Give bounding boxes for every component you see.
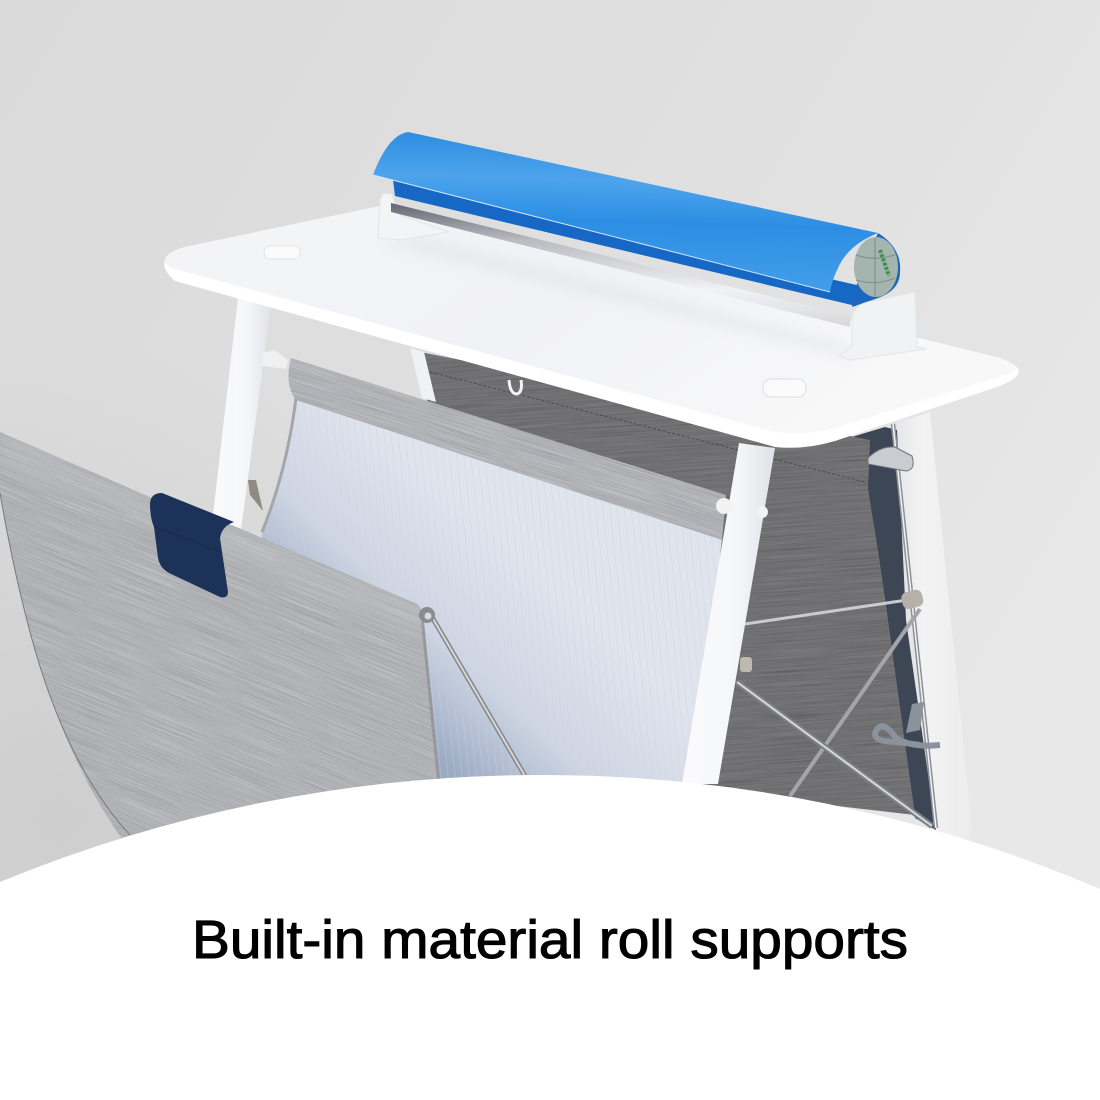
hook bbox=[509, 380, 522, 394]
blue material roll bbox=[373, 132, 900, 307]
title: built-in material roll supports: Built-in material roll supports bbox=[192, 910, 908, 970]
front gray fabric panel bbox=[0, 432, 440, 838]
chrome frame rods and clips bbox=[737, 424, 940, 828]
navy leather tab bbox=[150, 493, 234, 597]
gray top strip of paper panel bbox=[288, 358, 726, 540]
chrome roll bar bbox=[391, 203, 850, 327]
peg: right bbox=[763, 379, 806, 397]
back navy fabric edge bbox=[835, 427, 936, 830]
table top bbox=[164, 206, 1019, 448]
frame rod and grommet bbox=[419, 607, 525, 776]
back left table leg bbox=[410, 348, 436, 402]
right roll bracket bbox=[839, 292, 926, 360]
back fabric panel bbox=[424, 352, 914, 815]
front table leg bbox=[682, 443, 775, 784]
hanging paper panel bbox=[262, 398, 722, 800]
peg: left bbox=[264, 246, 300, 259]
back right table leg bbox=[897, 412, 972, 860]
roll core end bbox=[854, 237, 898, 297]
blue sheet bbox=[373, 132, 878, 292]
left roll bracket bbox=[378, 193, 449, 240]
white curved footer panel bbox=[0, 775, 1100, 1100]
left table leg bbox=[213, 298, 288, 530]
